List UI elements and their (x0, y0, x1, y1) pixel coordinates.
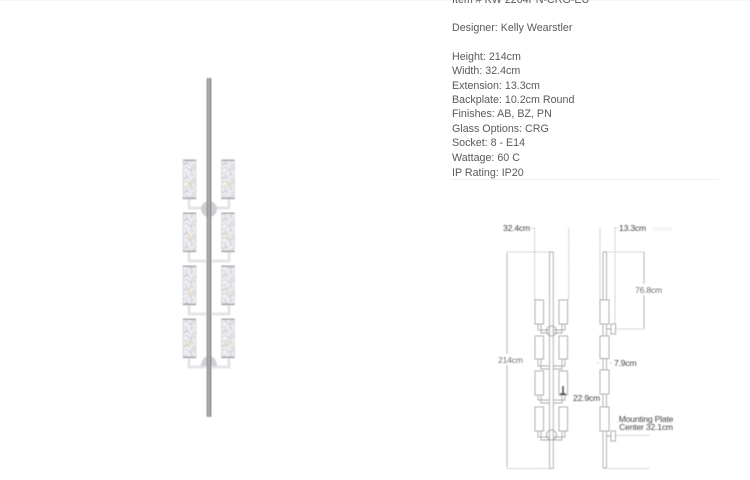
lower backplate (201, 356, 217, 366)
dimensions and options list: Width: 32.4cm (452, 65, 520, 77)
left shades (535, 300, 544, 431)
dimensions and options list: IP Rating: IP20 (452, 167, 524, 179)
bulb detail (560, 386, 566, 395)
shades left column (183, 160, 196, 358)
dimensions and options list: Glass Options: CRG (452, 123, 549, 135)
dimensions and options list: Wattage: 60 C (452, 152, 520, 164)
dimensions and options list: Finishes: AB, BZ, PN (452, 108, 552, 120)
faint drawing reference: KW2204 (653, 227, 672, 233)
extension dimension (600, 223, 646, 325)
right shades (559, 300, 568, 431)
extension dimension: 13.3cm (619, 223, 646, 233)
depth dimension: 7.9cm (614, 358, 636, 368)
dimensions and options list: Extension: 13.3cm (452, 80, 540, 92)
socket spacing label: 22.9cm (573, 393, 600, 403)
dimensions and options list: Height: 214cm (452, 51, 521, 63)
product photo: eight-light wall sconce (183, 78, 234, 417)
backplates (546, 326, 556, 336)
upper backplate (201, 201, 217, 217)
height dimension (496, 252, 553, 468)
pole outline (550, 252, 553, 468)
front elevation drawing (496, 223, 600, 468)
specification text block (452, 0, 589, 179)
height dimension: 214cm (498, 355, 523, 365)
depth dimension (597, 358, 636, 368)
mounting blocks (606, 324, 616, 441)
side shades (600, 300, 609, 431)
designer: Designer: Kelly Wearstler (452, 22, 573, 34)
dimensions and options list: Socket: 8 - E14 (452, 137, 525, 149)
central pole (207, 78, 211, 417)
side elevation drawing (597, 223, 674, 468)
sconce arms (189, 198, 229, 367)
dimensions and options list: Backplate: 10.2cm Round (452, 94, 574, 106)
side pole (603, 252, 606, 468)
upper mount dimension: 76.8cm (635, 285, 662, 295)
arms (538, 323, 565, 440)
upper mount dimension (606, 252, 663, 329)
mounting plate label (606, 414, 674, 468)
top page edge (0, 0, 750, 1)
mounting plate label: Center 32.1cm (619, 422, 673, 432)
dimensions and options list (452, 51, 574, 179)
shades right column (222, 160, 234, 358)
width dimension: 32.4cm (503, 223, 530, 233)
mounting plate label: Mounting Plate (619, 414, 674, 424)
width dimension (503, 223, 569, 300)
